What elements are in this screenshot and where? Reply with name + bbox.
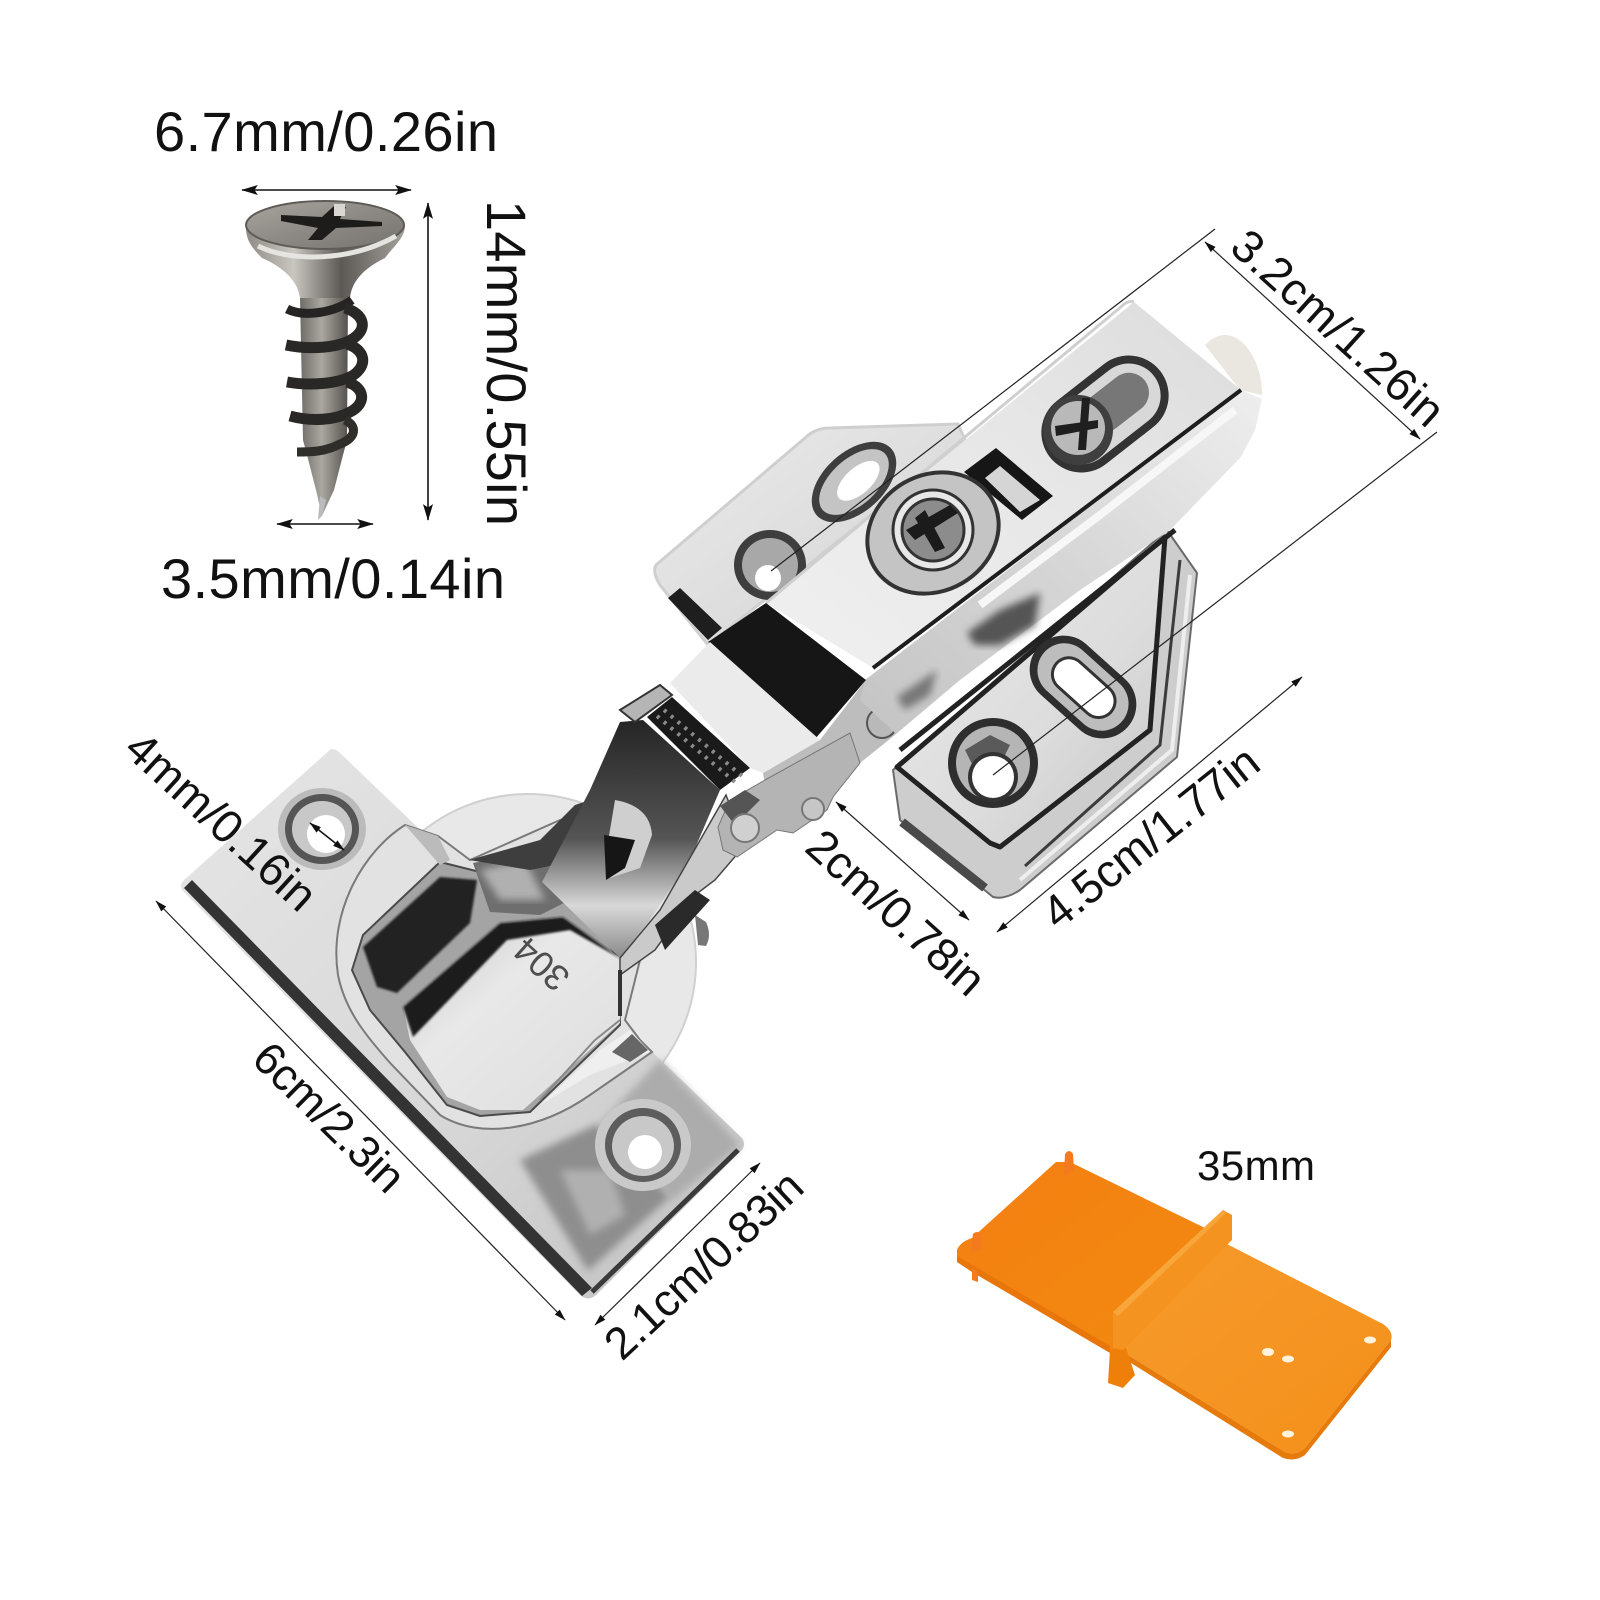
illustration: concealed cabinet hinge [181,302,1262,1298]
hinge: spring [620,685,750,790]
hinge: window inner [985,466,1040,512]
hinge: rectangular window [964,448,1053,520]
dimension: screw length arrow [427,203,429,520]
hinge: linkage plate with rivets [718,708,897,857]
hinge: hinge cup recess [336,800,652,1129]
hinge: cup stamp text: 304 [505,929,577,1000]
label: screw thread width: 3.5mm/0.14in [161,547,505,610]
hinge: adjustment slot and screw [1025,339,1185,489]
hinge: cup flange circle [360,794,696,1130]
hinge: lower mounting plate [893,530,1197,898]
label: 3.2cm width: 3.2cm/1.26in [1221,219,1455,437]
dimension: arrow 2.1cm [595,1163,760,1325]
dimension: screw head width arrow [242,189,411,191]
dimension: arrow 3.2cm [1205,242,1420,439]
hinge: upper mounting plate [655,424,965,645]
hinge: screw hole top [278,788,366,870]
hinge: arm knob [1205,335,1262,395]
label: screw length: 14mm/0.55in [475,200,538,526]
jig: fence [1108,1210,1232,1388]
jig: pins [971,1151,1074,1282]
hinge: arm to linkage filler [763,680,896,797]
dimension: arrow 2cm [836,802,969,920]
dimension: screw thread width arrow [277,523,373,525]
label: 4.5cm length: 4.5cm/1.77in [1032,735,1269,939]
hinge: screw-plate strip [181,749,744,1298]
jig: left plate [957,1162,1205,1352]
dimension: arrow hole diameter [310,823,344,850]
jig: left plate rim [957,1256,1110,1353]
label: 4mm hole diameter: 4mm/0.16in [115,721,328,921]
hinge: arm rivet boss and screw [845,449,1021,617]
label: 35mm hole size: 35mm [1197,1142,1315,1189]
dimension: arrow 4.5cm [997,677,1302,932]
icon: wood screw [246,201,405,520]
hinge: main arm [670,302,1262,773]
dimension: long extension line through lower plate hole [993,432,1437,775]
hinge: lower arm with hole [542,720,745,1016]
label: screw head width: 6.7mm/0.26in [154,100,498,163]
dimension: long extension line through upper plate hole [771,229,1215,571]
illustration: orange drilling jig [957,1151,1392,1459]
hinge: side pin [695,915,709,946]
label: 2cm depth: 2cm/0.78in [796,819,996,1006]
jig: right plate [1123,1243,1392,1459]
dimension: arrow 6cm [156,901,565,1320]
label: 2.1cm plate width: 2.1cm/0.83in [594,1160,813,1369]
hinge: screw hole bottom [595,1099,691,1191]
label: 6cm plate length: 6cm/2.3in [243,1032,416,1203]
